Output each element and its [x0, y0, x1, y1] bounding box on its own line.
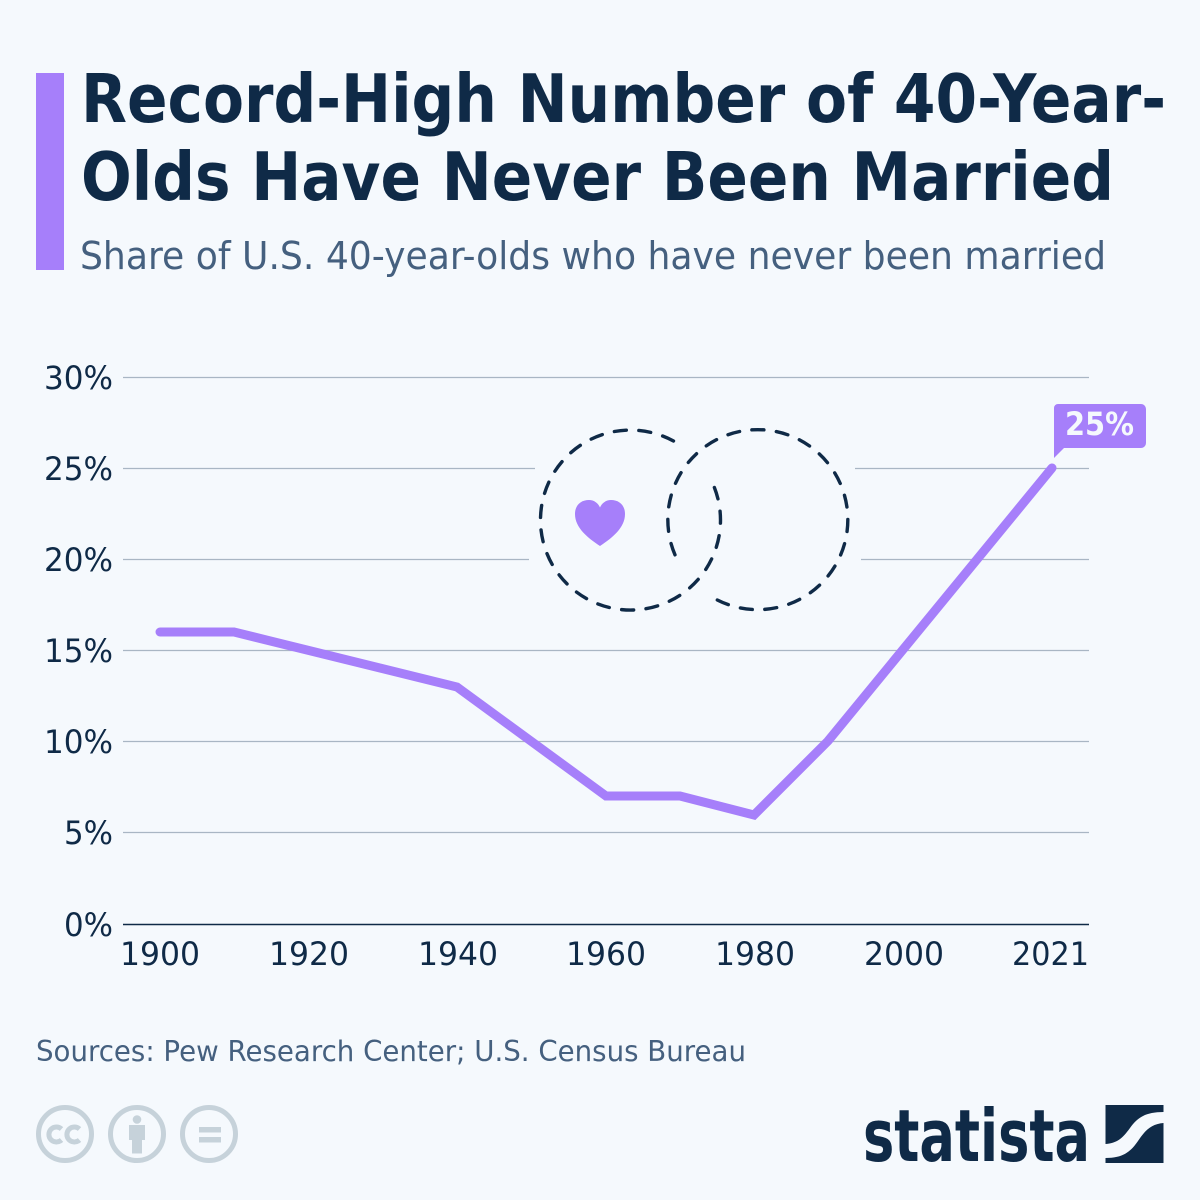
- y axis labels: 5%: [64, 814, 113, 852]
- icon: interlocked rings with heart: [540, 430, 848, 610]
- y axis labels: 10%: [44, 723, 113, 761]
- icon: statista mark: [1106, 1105, 1164, 1163]
- value label: 25%: 25%: [1065, 405, 1134, 443]
- value label: 25%: [1054, 404, 1146, 458]
- x axis labels: [120, 935, 1089, 973]
- y axis labels: [44, 359, 113, 944]
- accent bar: [36, 73, 64, 270]
- data line: [160, 468, 1052, 815]
- x axis labels: 1940: [418, 935, 498, 973]
- y axis labels: 15%: [44, 632, 113, 670]
- icon: cc license: [38, 1108, 92, 1160]
- y axis labels: 0%: [64, 906, 113, 944]
- line chart: [44, 359, 1146, 973]
- icon: no derivatives: [182, 1108, 236, 1160]
- x axis labels: 2000: [864, 935, 944, 973]
- y axis labels: 20%: [44, 541, 113, 579]
- y axis labels: 25%: [44, 450, 113, 488]
- x axis labels: 1920: [269, 935, 349, 973]
- icon: heart: [575, 500, 625, 546]
- x axis labels: 1900: [120, 935, 200, 973]
- title: [81, 60, 1166, 216]
- x axis labels: 1960: [566, 935, 646, 973]
- x axis labels: 1980: [715, 935, 795, 973]
- x axis labels: 2021: [1012, 935, 1089, 973]
- source note: Sources: Pew Research Center; U.S. Census Bureau: [36, 1035, 746, 1068]
- subtitle: Share of U.S. 40-year-olds who have never been married: [80, 234, 1106, 278]
- statista logo: statista: [863, 1094, 1090, 1178]
- y axis labels: 30%: [44, 359, 113, 397]
- icon: attribution: [110, 1108, 164, 1160]
